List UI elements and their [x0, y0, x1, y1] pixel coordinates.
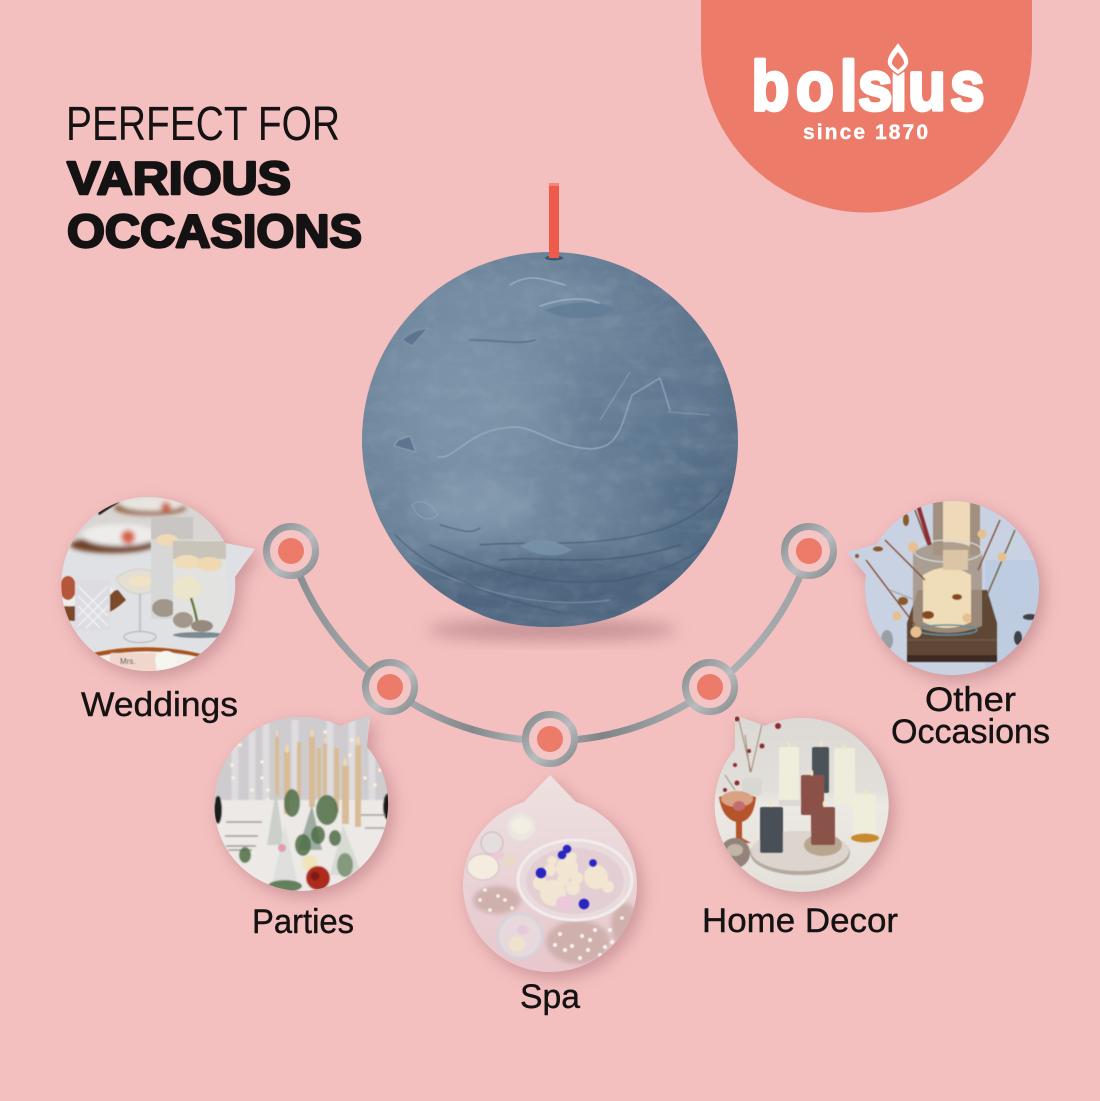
wick highlight: [549, 183, 559, 186]
label: other: Other: [925, 681, 1016, 719]
icon: logo flame: [887, 42, 909, 75]
connector arc: [300, 576, 800, 741]
bubble shadow: [219, 721, 393, 897]
logo tagline: since 1870: [803, 121, 928, 144]
photo: wedding table: Mrs.: [120, 657, 136, 666]
logo flame core: [892, 52, 904, 70]
logo badge: [701, 0, 1032, 212]
title: [66, 98, 362, 257]
bubble shadow: [852, 507, 1044, 681]
panel: parties: [210, 710, 395, 941]
bubble shadow: [720, 721, 894, 898]
logo wordmark: bolsius: [752, 47, 984, 125]
photo: floating candles: [463, 775, 637, 972]
candle body: [355, 245, 745, 635]
candle sphere: [355, 183, 745, 640]
node: spa: [526, 714, 574, 764]
label: Weddings: [81, 686, 238, 724]
bubble shadow: [66, 503, 260, 677]
label: Spa: [520, 978, 580, 1016]
title: OCCASIONS: [67, 205, 362, 257]
wick hole: [545, 256, 563, 260]
panel: home decor: [702, 710, 898, 940]
candle wick: [549, 183, 559, 260]
candle shadow: [427, 620, 677, 640]
node: parties: [366, 662, 414, 712]
node: other occasions: [784, 526, 834, 576]
label: Home Decor: [702, 902, 898, 940]
connector nodes: [266, 526, 834, 764]
photo: glass lantern: [847, 501, 1039, 676]
node: weddings: [266, 526, 316, 576]
panel: other occasions: [840, 495, 1050, 751]
bubble shadow: [468, 781, 642, 978]
title: PERFECT FOR: [66, 98, 340, 151]
node: home decor: [686, 662, 734, 712]
panel: weddings: [55, 490, 260, 724]
panel: spa: [455, 770, 645, 1016]
label: occasions: Occasions: [891, 713, 1050, 751]
photo: pillar candles: [714, 715, 889, 892]
photo: wedding table: [61, 497, 255, 671]
label: Parties: [252, 903, 354, 941]
title: VARIOUS: [67, 152, 291, 204]
photo: party table: [214, 715, 388, 891]
wick base: [549, 183, 559, 258]
